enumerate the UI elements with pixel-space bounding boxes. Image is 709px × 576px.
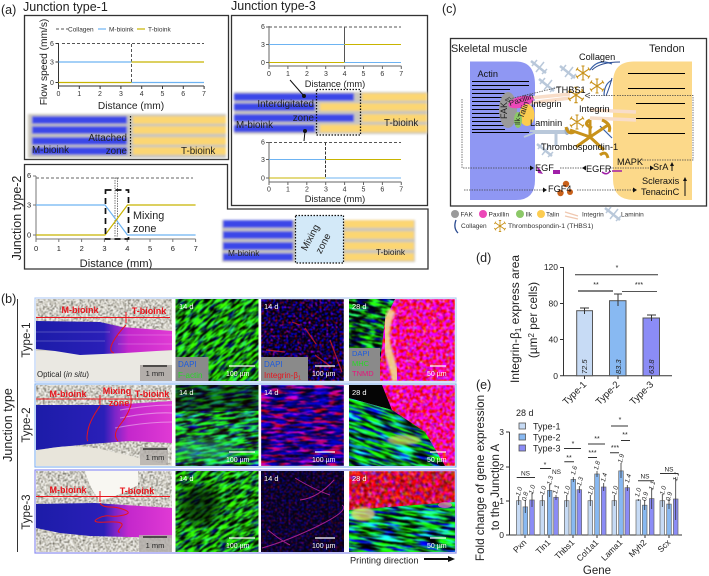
y-axis title: express area: [508, 255, 522, 328]
image: type-2 optical: Mixing: [103, 386, 131, 396]
y-axis title: 1: [514, 327, 523, 332]
chart: type-3 upper flow speed: 5: [362, 71, 366, 78]
significance markers: NS: [552, 469, 562, 476]
image: type-2 optical: 1 mm: [146, 453, 164, 462]
image: type-2 optical: [36, 385, 172, 466]
bar value labels: 83.3: [614, 359, 623, 374]
diagram: type-2 mixing zone strips: Mixing: [299, 223, 322, 253]
schematic legend: Thrombospondin-1 (THBS1): [508, 223, 593, 230]
panel (d): integrin bar chart: [476, 251, 672, 408]
chart: type-1 flow speed: [39, 19, 206, 112]
axes: 1: [499, 496, 504, 506]
chart: type-3 lower flow speed: 0: [267, 186, 271, 194]
chart: type-1 flow speed: 4: [140, 91, 144, 98]
bar value labels: 1.0: [587, 485, 596, 496]
icons: focal adhesion complex: Paxillin: [508, 92, 535, 108]
chart: type-2 flow speed: 6: [27, 171, 31, 180]
image: type-3 F-actin: 100 µm: [226, 543, 250, 550]
axes: 0: [553, 371, 558, 381]
schematic labels: FGF4: [548, 184, 571, 194]
chart: type-3 lower flow speed: 6: [261, 140, 265, 146]
axes: 3: [499, 427, 504, 437]
diagram: type-3 interdigitated zone strips: M-bioink: [236, 120, 273, 131]
image: type-3 optical: 1 mm: [146, 541, 164, 550]
schematic labels: EGFR: [586, 164, 612, 174]
tendon cell: Tendon: [649, 43, 685, 55]
image: type-3 integrin: 14 d: [264, 474, 279, 483]
axis: junction type: Type-3: [21, 494, 33, 530]
significance brackets: ***: [635, 282, 643, 289]
image: type-1 optical: M-bioink: [62, 305, 99, 315]
panel (a): junction types: [1, 0, 428, 270]
chart: type-1 flow speed: Distance (mm): [98, 101, 164, 112]
chart: type-3 upper flow speed: 0: [267, 71, 271, 78]
chart: type-2 flow speed: 0: [27, 230, 31, 240]
bar value labels: 63.8: [647, 359, 656, 374]
significance markers: NS: [664, 466, 674, 474]
schematic labels: Integrin: [579, 104, 610, 114]
skeletal muscle cell: Actin: [478, 69, 498, 79]
image: type-1 optical: Optical (in situ): [37, 370, 89, 379]
axes: Type-3: [628, 379, 656, 408]
image: type-2 MHC TNMD: [349, 385, 455, 466]
chart: type-1 flow speed: 6: [181, 91, 185, 98]
chart: type-2 flow speed: 3: [27, 200, 31, 210]
schematic labels: Thrombospondin-1: [541, 142, 618, 152]
diagram: type-3 interdigitated zone strips: T-bioink: [384, 118, 418, 129]
image: type-3 F-actin: 14 d: [179, 474, 194, 483]
schematic labels: Scleraxis: [642, 176, 680, 186]
frame: type-2: [24, 164, 428, 269]
chart: type-1 flow speed: 0: [56, 91, 60, 98]
bar value labels: 1.9: [617, 453, 626, 464]
schematic labels: EGF: [535, 163, 554, 173]
schematic legend: [451, 207, 644, 233]
bar value labels: 1.1: [648, 480, 657, 491]
diagram: type-3 interdigitated zone strips: [234, 80, 427, 141]
legend: Type-1: [533, 422, 561, 432]
chart: type-2 flow speed: 2: [80, 244, 84, 253]
schematic labels: TenacinC: [641, 187, 680, 197]
axis: junction type: [1, 299, 33, 552]
axes: [544, 262, 672, 408]
schematic labels: SrA: [653, 162, 669, 172]
chart: type-2 flow speed: Mixing: [133, 210, 164, 222]
schematic legend: Laminin: [621, 212, 644, 218]
schematic labels: [530, 52, 680, 197]
image: type-1 MHC TNMD: 28 d: [352, 302, 367, 311]
chart: type-2 flow speed: zone: [133, 223, 156, 235]
chart: type-3 lower flow speed: 5: [362, 186, 366, 194]
panel label a: (a): [1, 3, 16, 17]
legend: Type-2: [533, 432, 561, 442]
image: type-3 optical: [36, 471, 172, 552]
legend: Type-3: [533, 444, 561, 454]
bar value labels: [515, 453, 681, 502]
heading: junction type-1: Junction type-1: [23, 0, 108, 14]
schematic labels: Laminin: [530, 118, 562, 128]
panel label c: (c): [442, 2, 457, 16]
diagram: type-3 interdigitated zone strips: zone: [293, 113, 315, 124]
image: type-1 MHC TNMD: MHC: [352, 359, 370, 368]
schematic legend: FAK: [460, 212, 473, 218]
diagram: type-3 interdigitated zone strips: Interdigitated: [257, 99, 314, 110]
image: type-1 integrin: DAPI: [264, 360, 283, 369]
grouped bars: [516, 471, 678, 535]
diagram: type-1 attached zone strips: M-bioink: [32, 145, 69, 156]
axes: Myh2: [627, 537, 649, 559]
chart: type-2 flow speed: 6: [171, 244, 175, 253]
chart: type-2 flow speed: 5: [148, 244, 152, 253]
image: type-3 integrin: [261, 471, 344, 552]
significance markers: **: [622, 432, 628, 439]
chart: type-3 upper flow speed: 1: [286, 71, 290, 78]
bar value labels: 1.3: [576, 476, 585, 487]
significance markers: ***: [588, 450, 597, 457]
bar value labels: 1.0: [515, 486, 524, 497]
bar value labels: 0.8: [521, 491, 530, 502]
y-axis title: to the Junction A: [489, 444, 502, 530]
chart: type-1 flow speed: 1: [77, 91, 81, 98]
bar value labels: 1.6: [570, 465, 579, 476]
image: type-2 MHC TNMD: 50 µm: [427, 457, 447, 464]
diagram: type-1 attached zone strips: T-bioink: [181, 146, 215, 157]
chart: type-2 flow speed: Distance (mm): [80, 258, 153, 270]
significance markers: *: [544, 462, 547, 469]
image: type-3 MHC TNMD: 50 µm: [427, 543, 447, 550]
chart: type-3 lower flow speed: 6: [380, 186, 384, 194]
icons: thrombospondin stars: [566, 66, 610, 158]
axes: Type-1: [561, 379, 589, 408]
chart: type-3 upper flow speed: 2: [305, 71, 309, 78]
significance markers: ***: [611, 445, 619, 452]
image: type-2 optical: zone: [109, 398, 129, 408]
schematic legend: Paxillin: [488, 212, 509, 218]
axis: junction type: Junction type: [1, 388, 15, 462]
image: type-1 F-actin: F-actin: [178, 371, 202, 380]
chart: type-3 upper flow speed: Distance (mm): [305, 79, 365, 89]
diagram: type-2 mixing zone strips: [222, 216, 415, 263]
image: type-1 F-actin: [176, 299, 258, 381]
chart: type-2 flow speed: Junction type-2: [10, 176, 24, 260]
y-axis title: [474, 395, 502, 561]
panel (c): signalling schematic: [442, 2, 706, 233]
axes: 120: [544, 262, 558, 272]
schematic labels: Collagen: [579, 52, 615, 62]
chart: type-2 flow speed: 7: [194, 244, 198, 253]
y-axis title: [508, 255, 540, 383]
caption: printing direction arrow: [350, 556, 455, 566]
schematic frame: [450, 38, 706, 206]
bar value labels: 1.1: [552, 484, 561, 495]
image: type-2 optical: M-bioink: [50, 389, 87, 399]
axes: Lama1: [599, 537, 625, 563]
error bars: [519, 463, 676, 520]
bar value labels: 1.4: [600, 472, 609, 483]
image: type-1 integrin: 1: [298, 376, 301, 382]
chart: type-1 flow speed: 7: [202, 91, 206, 98]
image: type-1 integrin: [261, 299, 344, 382]
significance brackets: [575, 265, 658, 292]
axes: Col1a1: [574, 537, 601, 563]
bar value labels: 1.3: [546, 475, 555, 486]
image: type-1 integrin: 14 d: [264, 302, 279, 311]
image: type-1 optical: [36, 299, 172, 381]
panel (e): gene expression chart: [474, 378, 682, 576]
dashed signalling arrows: [462, 87, 693, 190]
image: type-1 integrin: Integrin-β: [264, 371, 298, 380]
significance brackets: **: [593, 282, 599, 289]
significance brackets: *: [616, 265, 619, 272]
image: type-1 F-actin: 14 d: [179, 302, 194, 311]
diagram: type-2 mixing zone strips: T-bioink: [376, 247, 406, 257]
axes: [499, 427, 682, 576]
chart: type-1 flow speed: T-bioink: [148, 26, 172, 34]
axes: 0: [499, 530, 504, 540]
image: type-2 integrin: 100 µm: [312, 457, 336, 464]
image: type-1 MHC TNMD: 50 µm: [427, 371, 447, 378]
panel label d: (d): [476, 251, 491, 265]
bars with values: [577, 294, 660, 376]
image: type-2 F-actin: 100 µm: [226, 457, 250, 464]
bar value labels: 1.8: [593, 460, 602, 471]
tendon cell: [613, 43, 692, 200]
schematic legend: Talin: [546, 212, 560, 218]
image: type-1 F-actin: 100 µm: [226, 371, 250, 378]
schematic legend: Ilk: [526, 212, 533, 218]
y-axis title: 2: [527, 333, 536, 338]
legend: [519, 422, 561, 454]
chart: type-3 upper flow speed: 6: [380, 71, 384, 78]
chart: type-1 flow speed: 0: [50, 80, 54, 87]
axes: Type-2: [594, 379, 622, 408]
image: type-2 F-actin: 14 d: [179, 388, 194, 397]
image: type-3 optical: M-bioink: [50, 485, 87, 495]
chart: type-1 flow speed: 5: [160, 91, 164, 98]
axes: Thbs1: [553, 537, 577, 561]
significance markers: [517, 417, 678, 481]
bar value labels: 1.0: [659, 485, 668, 496]
schematic labels: Integrin: [531, 99, 562, 109]
chart: type-3 upper flow speed: 6: [261, 24, 265, 31]
bar value labels: 1.1: [672, 471, 681, 482]
chart: type-1 flow speed: 6: [50, 41, 54, 48]
image: type-3 optical: T-bioink: [120, 486, 155, 496]
chart: type-1 flow speed: 3: [50, 60, 54, 66]
bar value labels: 1.0: [528, 484, 537, 495]
chart: type-2 flow speed: 3: [102, 244, 107, 253]
chart: type-3 lower flow speed: Distance (mm): [305, 194, 365, 204]
chart: type-3 lower flow speed: 1: [286, 186, 290, 194]
frame: type-1: [24, 16, 228, 160]
image: type-2 integrin: 14 d: [264, 388, 279, 397]
y-axis title: Integrin-β: [508, 332, 522, 383]
arrow heads: [530, 162, 687, 196]
significance markers: *: [619, 417, 622, 424]
schematic legend: Collagen: [461, 223, 487, 230]
chart: type-1 flow speed: Flow speed (mm/s): [39, 19, 50, 105]
chart: type-1 flow speed: 2: [98, 91, 102, 98]
icons: integrin and collagen: [530, 62, 636, 138]
schematic labels: MAPK: [617, 157, 644, 167]
diagram: type-1 attached zone strips: zone: [106, 146, 128, 157]
y-axis title: per cells): [526, 282, 540, 333]
image: type-3 integrin: 100 µm: [312, 543, 336, 550]
chart: type-3 upper flow speed: 7: [399, 71, 403, 78]
significance markers: **: [566, 455, 572, 462]
icons: laminin cluster: [524, 60, 576, 157]
chart: type-3 upper flow speed: 3: [324, 71, 328, 78]
chart: type-3 lower flow speed: 7: [399, 186, 403, 194]
chart: type-1 flow speed: Collagen: [68, 26, 94, 34]
chart: type-3 lower flow speed: 4: [343, 186, 347, 194]
diagram: type-2 mixing zone strips: M-bioink: [228, 248, 260, 258]
image: type-3 MHC TNMD: [349, 471, 455, 552]
row borders: [35, 298, 456, 553]
image: type-1 MHC TNMD: [349, 299, 455, 381]
frame: type-3: [232, 16, 428, 206]
bar value labels: 1.0: [634, 487, 643, 498]
image: type-3 F-actin: [176, 471, 258, 552]
timepoint label: 28 d: [516, 408, 534, 418]
bar value labels: 0.9: [641, 491, 650, 502]
diagram: type-1 attached zone strips: [28, 114, 226, 158]
image: type-1 optical: T-bioink: [132, 306, 167, 316]
axes: 40: [549, 334, 558, 344]
chart: type-3 lower flow speed: 0: [261, 176, 265, 182]
icons: focal adhesion complex: [499, 92, 535, 128]
bar value labels: 1.0: [563, 485, 572, 496]
chart: type-2 flow speed: [10, 171, 198, 270]
chart: type-3 upper flow speed: 4: [343, 71, 347, 78]
bar value labels: [580, 359, 656, 374]
chart: type-3 lower flow speed: 3: [261, 157, 265, 164]
panel label e: (e): [476, 378, 491, 392]
significance markers: **: [594, 436, 600, 443]
chart: type-1 flow speed: 3: [119, 91, 123, 98]
panel label b: (b): [1, 292, 16, 306]
y-axis title: (µm: [526, 338, 540, 358]
chart: type-2 flow speed: 4: [125, 244, 129, 253]
chart: type-3 lower flow speed: 3: [324, 186, 328, 194]
image: type-1 F-actin: DAPI: [178, 360, 197, 369]
axis: junction type: Type-2: [21, 407, 33, 443]
image: type-2 integrin: [261, 385, 344, 466]
significance markers: NS: [640, 474, 650, 480]
chart: type-3 upper flow speed: 0: [261, 60, 265, 67]
axes: Tln1: [534, 537, 553, 556]
chart: type-2 flow speed: 0: [34, 244, 38, 253]
axes: Scx: [655, 537, 673, 554]
image: type-2 optical: T-bioink: [135, 389, 170, 399]
bar value labels: 72.5: [580, 359, 589, 374]
icons: focal adhesion complex: Talin: [515, 100, 531, 120]
bar value labels: 1.0: [539, 485, 548, 496]
image: type-3 MHC TNMD: 28 d: [352, 474, 367, 483]
axes: 2: [499, 462, 504, 472]
significance markers: NS: [521, 470, 531, 478]
skeletal muscle cell: [451, 43, 535, 200]
bar value labels: 0.9: [665, 491, 674, 502]
icons: focal adhesion complex: Ilk: [515, 118, 522, 125]
image: type-1 integrin: 100 µm: [312, 371, 336, 378]
bar value labels: 1.0: [611, 485, 620, 496]
image: type-1 optical: 1 mm: [146, 369, 164, 378]
image: type-1 MHC TNMD: DAPI: [352, 349, 370, 358]
caption: printing direction arrow: Printing direction: [350, 556, 418, 566]
significance markers: *: [572, 441, 575, 448]
schematic legend: Integrin: [582, 212, 604, 218]
bar value labels: 1.4: [624, 473, 633, 484]
chart: type-2 flow speed: 1: [57, 244, 61, 253]
axes: Pxn: [511, 537, 529, 555]
icons: focal adhesion complex: FAK: [499, 102, 509, 119]
chart: type-3 upper flow speed: 3: [261, 42, 265, 49]
image: type-2 MHC TNMD: 28 d: [352, 388, 367, 397]
chart: type-3 lower flow speed: 2: [305, 186, 309, 194]
skeletal muscle cell: Skeletal muscle: [451, 43, 527, 55]
axes: 80: [549, 298, 558, 308]
diagram: type-2 mixing zone strips: zone: [314, 231, 334, 256]
chart: type-1 flow speed: M-bioink: [109, 26, 134, 34]
chart: type-3 lower flow speed: [261, 140, 403, 204]
diagram: type-1 attached zone strips: Attached: [88, 133, 127, 144]
chart: type-3 upper flow speed: [261, 24, 403, 89]
axis: junction type: Type-1: [21, 322, 33, 358]
schematic labels: THBS1: [556, 85, 586, 95]
image: type-2 F-actin: [176, 385, 258, 466]
icons: EGF and FGF4 ligands: [537, 166, 622, 196]
image: type-1 MHC TNMD: TNMD: [352, 369, 374, 378]
y-axis title: Fold change of gene expression: [474, 395, 487, 561]
panel (b): junction microscopy grid: [2, 294, 457, 566]
